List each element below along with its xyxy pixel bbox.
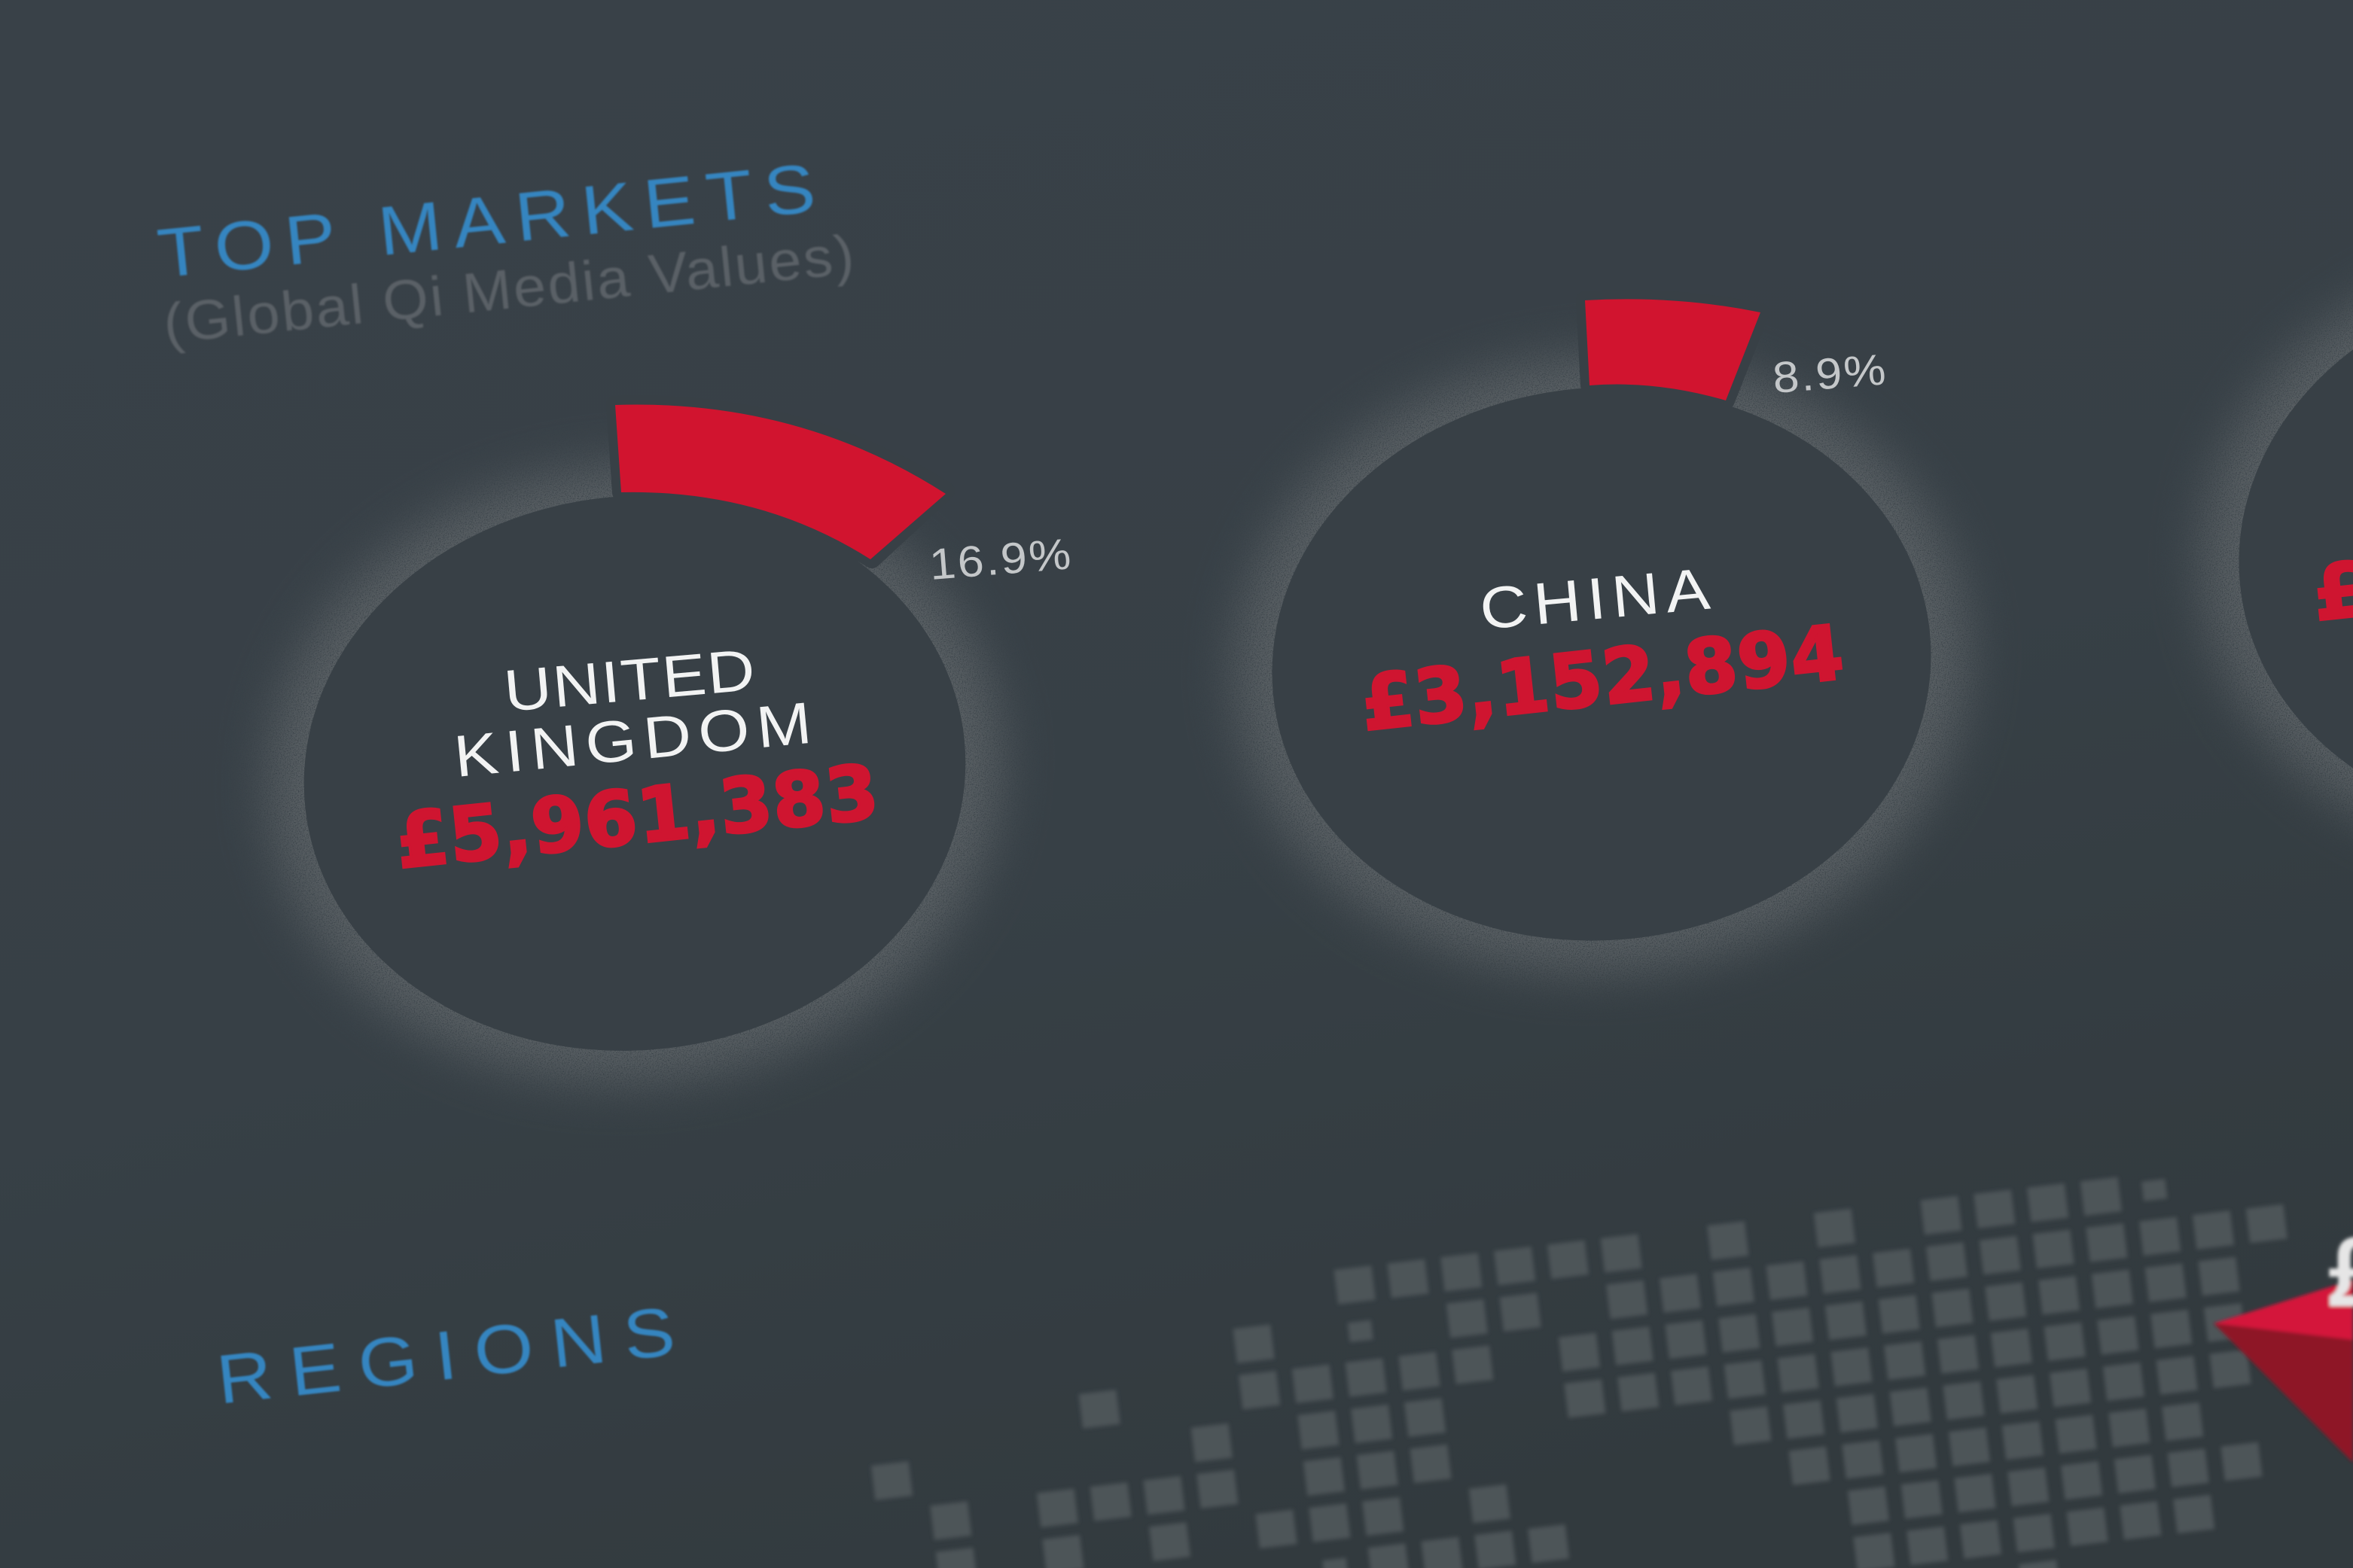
china arc gap	[1585, 299, 1760, 400]
uk disc	[276, 463, 993, 1083]
uk name line 2: KINGDOM	[451, 690, 814, 790]
china name: CHINA	[1477, 556, 1713, 642]
uk arc gap	[615, 405, 946, 559]
uk value: £5,961,383	[392, 747, 882, 886]
panel: china market	[1209, 299, 1995, 1003]
china disc	[1249, 360, 1954, 968]
uk share arc 16.9%	[615, 405, 946, 559]
third disc	[2216, 249, 2353, 857]
china share arc 8.9%	[1585, 299, 1760, 400]
uk percentage label: 16.9%	[928, 529, 1072, 589]
uk halo	[237, 428, 1032, 1119]
uk name line 1: UNITED	[501, 637, 757, 724]
pin lower facet	[2214, 1323, 2353, 1463]
subheading: global qi media values: (Global Qi Media Values)	[160, 224, 857, 355]
china percentage label: 8.9%	[1771, 345, 1888, 402]
heading: regions: REGIONS	[213, 1292, 678, 1419]
map marker: red pin	[2214, 1216, 2353, 1463]
third halo	[2175, 214, 2353, 893]
dot-matrix world map	[856, 1175, 2325, 1568]
panel: third market cropped at right edge	[2175, 214, 2353, 893]
china value: £3,152,894	[1357, 608, 1848, 748]
china halo	[1209, 324, 1995, 1003]
heading: top markets: TOP MARKETS	[154, 149, 818, 293]
pin upper facet	[2214, 1280, 2353, 1340]
panel: united kingdom market	[237, 405, 1072, 1119]
